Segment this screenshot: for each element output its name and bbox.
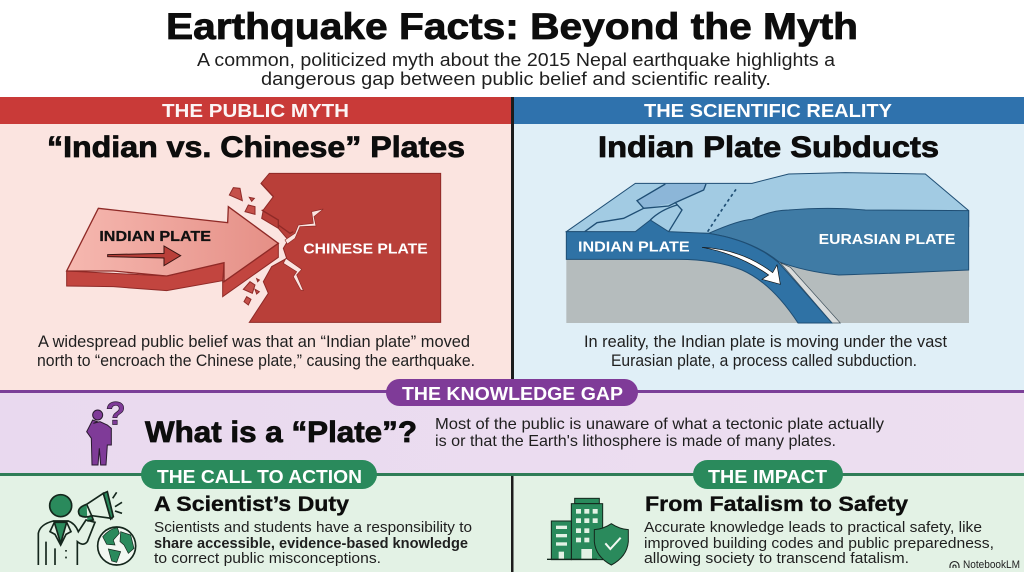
panel: the scientific reality — [512, 97, 1024, 391]
icon: scientist with megaphone and globe — [38, 492, 136, 565]
banner: the scientific reality: THE SCIENTIFIC REALITY — [644, 101, 892, 121]
text: knowledge gap description — [435, 416, 884, 450]
surface top — [566, 173, 969, 233]
title: Earthquake Facts: Beyond the Myth — [166, 6, 858, 47]
text: impact description — [644, 520, 994, 567]
text: call to action description: to correct public misconceptions. — [154, 551, 381, 567]
panel: the knowledge gap — [0, 379, 1024, 474]
text: knowledge gap description: Most of the public is unaware of what a tectonic plate actually — [435, 416, 884, 433]
icon: buildings and safety shield — [547, 498, 628, 565]
pill: the impact: THE IMPACT — [708, 466, 828, 487]
icon: confused person: ? — [106, 395, 126, 432]
heading: a scientist's duty: A Scientist’s Duty — [154, 493, 349, 516]
text: scientific reality description: Eurasian plate, a process called subduction. — [611, 351, 917, 370]
Indian plate subducting — [566, 220, 832, 323]
text: call to action description — [154, 520, 472, 567]
panel: the call to action — [0, 460, 512, 572]
arrow: subduction direction — [702, 247, 780, 284]
pill: the impact — [693, 460, 843, 489]
text: impact description: allowing society to transcend fatalism. — [644, 551, 909, 567]
Indian plate arrow: INDIAN PLATE — [99, 228, 211, 245]
Eurasian plate front — [709, 208, 969, 275]
text: call to action description: Scientists and students have a responsibility to — [154, 520, 472, 536]
banner: the public myth: THE PUBLIC MYTH — [162, 101, 349, 121]
subtitle: dangerous gap between public belief and scientific reality. — [261, 69, 771, 89]
pill: the call to action: THE CALL TO ACTION — [157, 466, 362, 487]
illustration: subduction cross-section — [566, 173, 969, 323]
heading: Indian vs Chinese plates: “Indian vs. Chinese” Plates — [47, 131, 465, 164]
pill: the knowledge gap — [386, 379, 638, 406]
mantle — [566, 259, 969, 323]
pill: the knowledge gap: THE KNOWLEDGE GAP — [402, 384, 623, 404]
icon: confused person — [87, 395, 126, 465]
heading: Indian plate subducts: Indian Plate Subducts — [598, 131, 939, 164]
Chinese plate block — [249, 173, 441, 322]
debris — [229, 188, 259, 305]
text: public myth description — [37, 332, 475, 370]
pill: the call to action — [141, 460, 377, 489]
panel: the impact — [512, 460, 1024, 572]
heading: what is a plate: What is a “Plate”? — [145, 416, 417, 449]
text: public myth description: north to “encroach the Chinese plate,” causing the earthquake. — [37, 351, 475, 370]
illustration: plates colliding — [67, 173, 441, 322]
panel: the public myth — [0, 97, 512, 391]
Indian plate arrow — [67, 207, 278, 297]
heading: from fatalism to safety: From Fatalism to Safety — [645, 493, 908, 516]
Indian plate subducting: INDIAN PLATE — [578, 239, 690, 256]
sliver — [780, 263, 840, 323]
text: impact description: improved building codes and public preparedness, — [644, 536, 994, 552]
text: public myth description: A widespread public belief was that an “Indian plate” moved — [38, 332, 470, 351]
subtitle: A common, politicized myth about the 2015 Nepal earthquake highlights a — [197, 50, 836, 70]
Eurasian plate front: EURASIAN PLATE — [819, 231, 955, 248]
subtitle — [197, 50, 836, 89]
text: call to action description: share accessible, evidence-based knowledge — [154, 536, 468, 552]
banner: the public myth — [0, 97, 512, 124]
Chinese plate block: CHINESE PLATE — [303, 240, 428, 257]
text: scientific reality description — [584, 332, 947, 370]
NotebookLM watermark: NotebookLM — [963, 559, 1020, 571]
text: scientific reality description: In reality, the Indian plate is moving under the vast — [584, 332, 947, 351]
text: impact description: Accurate knowledge leads to practical safety, like — [644, 520, 982, 536]
text: knowledge gap description: is or that the Earth's lithosphere is made of many plates. — [435, 433, 836, 450]
banner: the scientific reality — [514, 97, 1024, 124]
